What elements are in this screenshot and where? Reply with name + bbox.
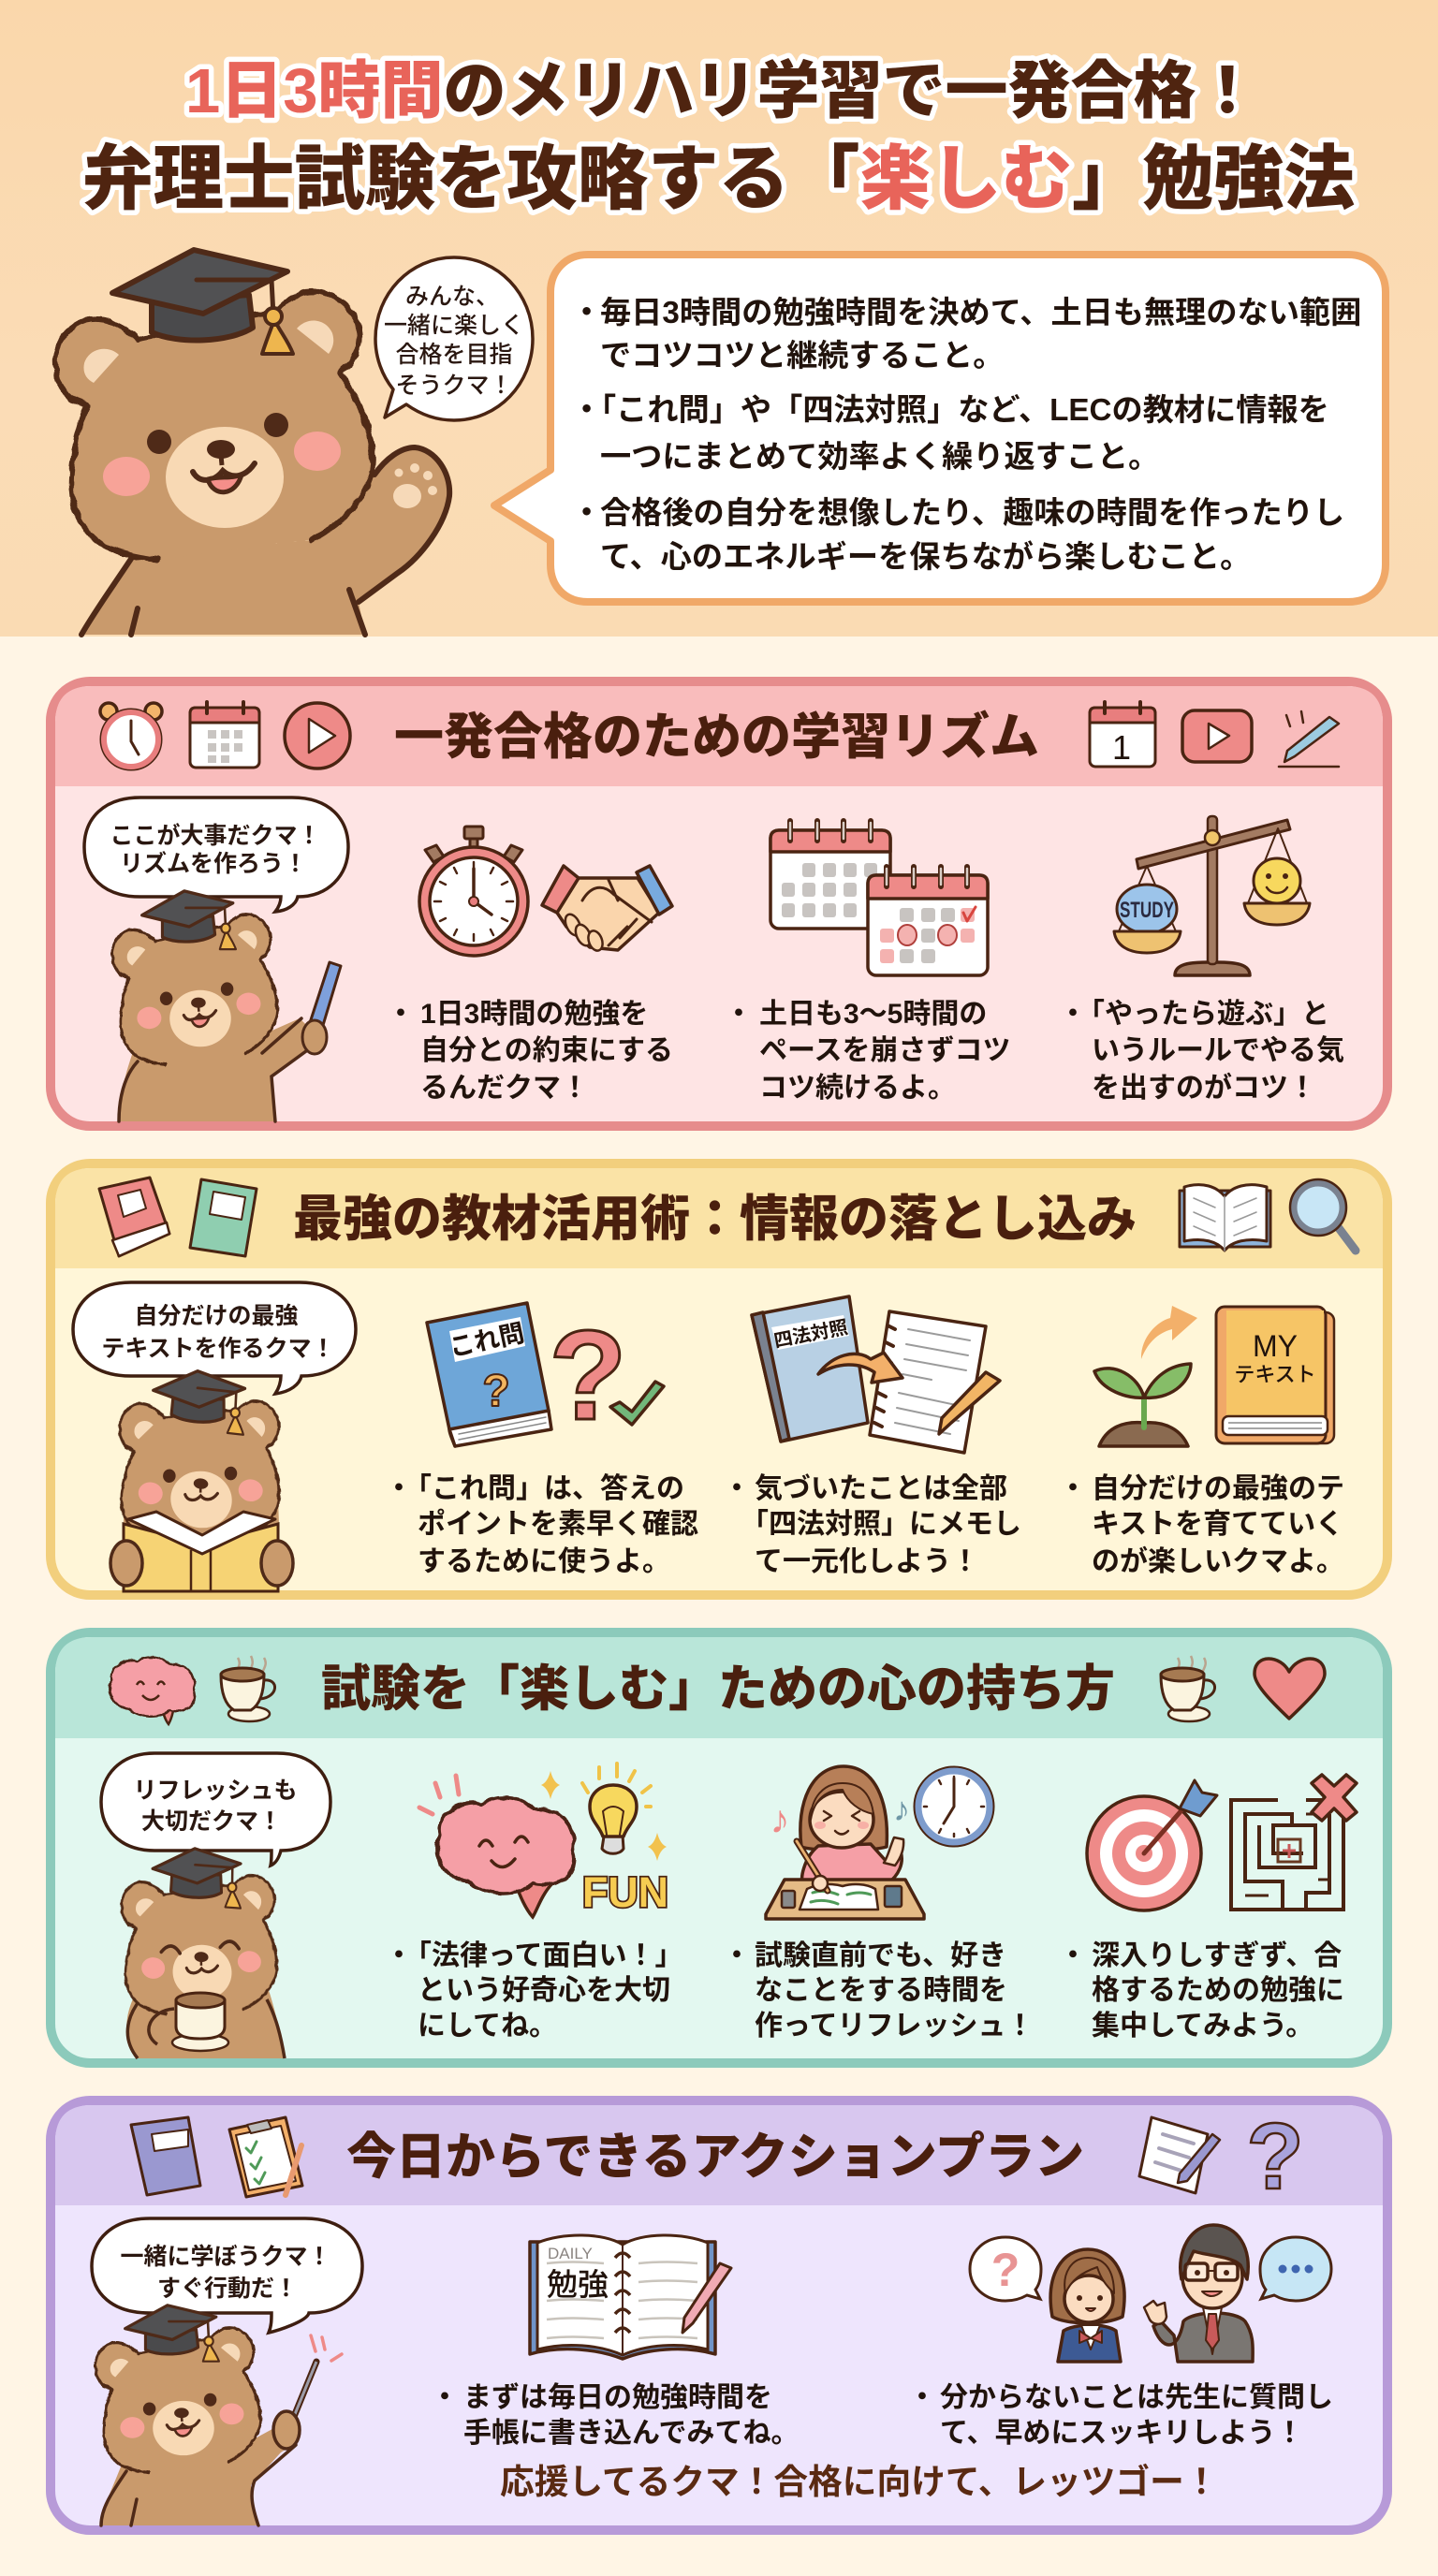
text: weekend pace: コツ続けるよ。	[759, 1073, 956, 1104]
icon: my textbook	[1216, 1307, 1334, 1443]
text: curiosity: ・	[385, 1940, 413, 1971]
icon: teacher	[1144, 2225, 1253, 2362]
text: grow your text: ・	[1059, 1473, 1087, 1504]
icon: alarm clock	[100, 703, 162, 769]
icon: music notes	[770, 1790, 910, 1841]
icon: maze	[1231, 1800, 1343, 1910]
text: question book use: するために使うよ。	[418, 1546, 670, 1577]
bear speech bubble: 一緒に学ぼうクマ！	[120, 2244, 331, 2270]
text: weekend pace: 土日も3〜5時間の	[759, 999, 987, 1030]
main summary callout: でコツコツと継続すること。	[600, 339, 1004, 373]
bear speech bubble: リズムを作ろう！	[120, 850, 307, 877]
icon: light bulb	[582, 1764, 651, 1853]
heading: 今日からできるアクションプラン	[346, 2130, 1084, 2185]
text: grow your text	[1059, 1473, 1344, 1577]
title: 1日3時間のメリハリ学習で一発合格！	[185, 56, 1259, 126]
panel: action plan	[51, 2100, 1387, 2530]
icon: balance scale: STUDY	[1120, 898, 1174, 923]
main summary callout: 合格後の自分を想像したり、趣味の時間を作ったりし	[600, 496, 1344, 531]
bear with coffee	[115, 1843, 285, 2058]
text: reward rule: ・	[1059, 999, 1087, 1030]
text: refresh time: ・	[723, 1940, 751, 1971]
text: planner advice	[431, 2382, 800, 2449]
icon: my textbook: MY	[1253, 1329, 1298, 1363]
text: study time promise: 1日3時間の勉強を	[420, 999, 648, 1030]
icon: calendar	[190, 702, 259, 768]
icon: green book	[190, 1179, 257, 1256]
arrow: into notebook	[818, 1353, 902, 1383]
text: notes centralised	[723, 1473, 1021, 1577]
bear speech bubble: テキストを作るクマ！	[101, 1336, 335, 1362]
icon: purple notebook	[131, 2117, 200, 2195]
text: ask the teacher: て、早めにスッキリしよう！	[940, 2418, 1303, 2449]
icon: smiling brain	[110, 1658, 195, 1724]
icon: daily planner	[530, 2235, 731, 2359]
main summary callout: ・	[571, 496, 602, 531]
bear with open book	[110, 1363, 293, 1591]
icon: calendar day one: 1	[1112, 728, 1131, 767]
text: reward rule: 「やったら遊ぶ」と	[1077, 999, 1329, 1030]
text: notes centralised: 「四法対照」にメモし	[741, 1509, 1021, 1540]
header background	[0, 0, 1438, 637]
bear speech bubble	[84, 798, 348, 912]
icon: pointer sparks	[311, 2335, 342, 2361]
icon: calendar day one	[1090, 702, 1155, 767]
text: refresh time: 試験直前でも、好き	[755, 1940, 1006, 1971]
label: FUN: FUN	[582, 1868, 668, 1916]
icon: heart	[1255, 1659, 1325, 1719]
bear speech bubble: ここが大事だクマ！	[110, 822, 321, 849]
text: question book use: ・	[385, 1473, 413, 1504]
icon: coffee cup right	[1161, 1656, 1215, 1721]
text: question book use	[385, 1473, 698, 1577]
icon: calendars	[770, 821, 988, 975]
icon: my textbook: テキスト	[1234, 1363, 1316, 1386]
heading: 最強の教材活用術：情報の落とし込み	[293, 1192, 1137, 1247]
panel: study materials	[51, 1164, 1387, 1595]
main summary callout: て、心のエネルギーを保ちながら楽しむこと。	[600, 539, 1251, 575]
text: focus: 深入りしすぎず、合	[1092, 1940, 1342, 1971]
small speech bubble	[375, 257, 533, 420]
text: grow your text: 自分だけの最強のテ	[1092, 1473, 1344, 1504]
text: refresh time	[723, 1940, 1034, 2042]
small speech bubble: 一緒に楽しく	[384, 313, 524, 339]
text: weekend pace: ・	[725, 999, 753, 1030]
icon: question book	[427, 1303, 551, 1446]
text: planner advice: ・	[431, 2382, 459, 2413]
text: study time promise: るんだクマ！	[420, 1073, 589, 1104]
icon: question bubble	[970, 2237, 1041, 2301]
icon: music notes: ♪	[770, 1797, 790, 1841]
text: notes centralised: ・	[723, 1473, 751, 1504]
icon: sprout	[1094, 1364, 1191, 1446]
text: focus	[1059, 1940, 1344, 2042]
text: ask the teacher	[908, 2382, 1333, 2449]
text: curiosity: 「法律って面白い！」	[404, 1940, 683, 1971]
main summary callout: ・	[571, 393, 602, 428]
icon: girl studying	[766, 1766, 924, 1919]
bear speech bubble	[92, 2218, 362, 2333]
text: refresh time: なことをする時間を	[755, 1975, 1007, 2006]
icon: balance scale	[1114, 816, 1310, 975]
icon: pen stroke	[1279, 711, 1339, 767]
text: notes centralised: 気づいたことは全部	[755, 1473, 1007, 1504]
text: grow your text: のが楽しいクマよ。	[1092, 1545, 1344, 1577]
text: ask the teacher: 分からないことは先生に質問し	[940, 2382, 1333, 2413]
text: study time promise: 自分との約束にする	[420, 1035, 673, 1066]
closing message: 応援してるクマ！合格に向けて、レッツゴー！	[500, 2463, 1219, 2501]
icon: question book: ?	[482, 1367, 510, 1416]
icon: red book	[99, 1178, 169, 1256]
text: reward rule: を出すのがコツ！	[1092, 1072, 1316, 1104]
text: question book use: ポイントを素早く確認	[418, 1509, 698, 1540]
text: focus: 集中してみよう。	[1092, 2011, 1313, 2042]
icon: magnifier	[1290, 1179, 1356, 1251]
icon: daily planner: 勉強	[547, 2267, 609, 2302]
text: grow your text: キストを育てていく	[1092, 1509, 1343, 1540]
icon: wall clock	[915, 1767, 993, 1846]
text: weekend pace: ペースを崩さずコツ	[759, 1035, 1011, 1066]
icon: memo and pen	[1139, 2117, 1220, 2193]
small speech bubble: そうクマ！	[395, 373, 513, 399]
icon: reference book	[752, 1296, 868, 1442]
bear speech bubble: リフレッシュも	[133, 1778, 298, 1804]
icon: sparkles	[541, 1771, 667, 1861]
text: focus: 格するための勉強に	[1092, 1975, 1344, 2006]
icon: question book: これ問	[447, 1319, 527, 1362]
icon: notebook	[870, 1311, 986, 1453]
icon: pencil	[939, 1372, 1000, 1434]
icon: target	[1087, 1780, 1217, 1910]
heading: 試験を「楽しむ」ための心の持ち方	[321, 1661, 1115, 1717]
bear speech bubble	[73, 1282, 356, 1394]
icon: coffee cup left	[221, 1656, 275, 1721]
text: study time promise: ・	[387, 999, 415, 1030]
icon: check mark	[610, 1382, 664, 1425]
icon: open book	[1180, 1185, 1270, 1251]
title	[82, 56, 1355, 218]
bear speech bubble: 自分だけの最強	[134, 1303, 299, 1329]
icon: question bubble: ?	[991, 2244, 1020, 2296]
main summary callout	[494, 255, 1386, 602]
main summary callout: 一つにまとめて効率よく繰り返すこと。	[600, 440, 1159, 475]
icon: play button	[285, 703, 350, 768]
text: reward rule	[1059, 999, 1344, 1104]
text: question book use: 「これ問」は、答えの	[404, 1473, 684, 1504]
small speech bubble: みんな、	[405, 284, 499, 310]
main summary callout: 「これ問」や「四法対照」など、LECの教材に情報を	[585, 393, 1329, 428]
icon: stopwatch	[419, 827, 528, 956]
text: focus: ・	[1059, 1940, 1087, 1971]
text: curiosity: にしてね。	[418, 2011, 557, 2042]
icon: video play	[1182, 710, 1252, 762]
icon: purple question mark: ?	[1246, 2104, 1304, 2209]
icon: checklist clipboard	[229, 2117, 302, 2197]
icon: reply bubble	[1260, 2237, 1331, 2301]
main summary callout: ・	[571, 296, 602, 330]
icon: reference book: 四法対照	[772, 1317, 850, 1352]
bear speech bubble: すぐ行動だ！	[157, 2276, 298, 2302]
icon: red cross	[1312, 1775, 1357, 1821]
panel: learning rhythm	[51, 681, 1387, 1126]
text: planner advice: 手帳に書き込んでみてね。	[463, 2418, 800, 2449]
text: reward rule: いうルールでやる気	[1092, 1035, 1344, 1066]
title: 弁理士試験を攻略する「楽しむ」勉強法	[82, 139, 1355, 218]
text: refresh time: 作ってリフレッシュ！	[755, 2011, 1034, 2042]
icon: daily planner: DAILY	[548, 2245, 593, 2262]
text: planner advice: まずは毎日の勉強時間を	[463, 2382, 772, 2413]
text: curiosity: という好奇心を大切	[418, 1975, 670, 2006]
heading: 一発合格のための学習リズム	[394, 709, 1039, 765]
icon: handshake	[542, 866, 672, 953]
hero bear waving	[55, 250, 449, 635]
small speech bubble: 合格を目指	[395, 342, 513, 368]
bear speech bubble	[101, 1753, 330, 1866]
icon: question mark: ?	[549, 1304, 627, 1446]
bear with pointer	[95, 2305, 316, 2525]
page background	[0, 637, 1438, 2576]
text: study time promise	[387, 999, 673, 1104]
icon: music notes: ♪	[893, 1790, 910, 1828]
bear speech bubble: 大切だクマ！	[141, 1808, 282, 1835]
icon: student	[1050, 2249, 1124, 2362]
bear with pen	[112, 891, 341, 1121]
arrow: growth	[1141, 1306, 1197, 1359]
text: curiosity	[385, 1940, 683, 2042]
text: weekend pace	[725, 999, 1011, 1104]
text: ask the teacher: ・	[908, 2382, 936, 2413]
icon: fun brain	[419, 1776, 575, 1917]
main summary callout: 毎日3時間の勉強時間を決めて、土日も無理のない範囲	[600, 296, 1361, 330]
panel: mindset	[51, 1632, 1387, 2063]
text: notes centralised: て一元化しよう！	[755, 1546, 979, 1577]
